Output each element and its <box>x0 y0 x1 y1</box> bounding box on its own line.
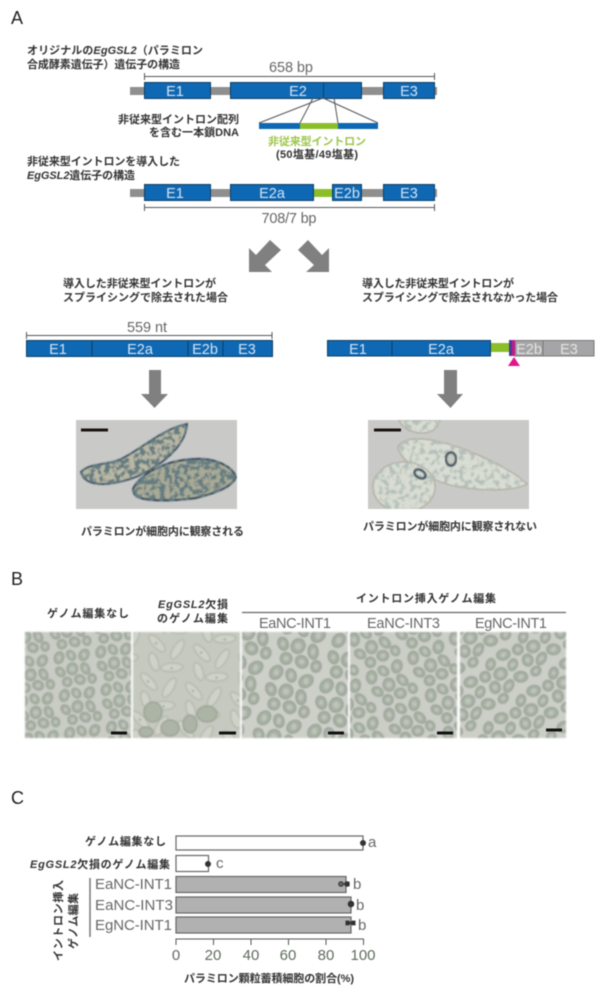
text: paramylon not observed: パラミロンが細胞内に観察されない <box>363 519 537 533</box>
text: spliced case heading: スプライシングで除去された場合 <box>63 290 228 304</box>
row label: EgNC-INT1: EgNC-INT1 <box>95 917 172 934</box>
diagram: original gene exons: E3 <box>400 84 418 100</box>
column label: EgGSL2 deletion: EgGSL2欠損 <box>158 597 228 611</box>
label: 658 bp bracket <box>144 60 434 80</box>
diagram: unspliced mRNA with stop codon: E3 <box>560 342 578 358</box>
diagram: spliced mRNA: E2a <box>127 342 154 358</box>
diagram: unspliced mRNA with stop codon: E1 <box>349 342 367 358</box>
significance letters: c <box>216 855 224 872</box>
text: non-canonical intron label <box>268 134 366 161</box>
panel: B micrographs <box>11 569 566 738</box>
x axis: 0 <box>172 947 180 964</box>
significance letters <box>216 834 377 934</box>
diagram: original gene exons: E1 <box>166 84 184 100</box>
column label: EgGSL2 deletion <box>157 597 228 625</box>
diagram: modified gene with intron: E2b <box>334 186 360 202</box>
significance letters: b <box>353 876 361 893</box>
panel: C bar chart <box>11 788 377 985</box>
diagram: spliced mRNA: E3 <box>238 342 256 358</box>
label: EaNC-INT3: EaNC-INT3 <box>367 616 440 632</box>
x axis: 80 <box>318 947 334 964</box>
diagram: original gene exons: E2 <box>289 84 307 100</box>
label: 708/7 bp bracket <box>144 204 434 227</box>
image: no editing field <box>25 632 131 738</box>
text: modified gene structure caption: EgGSL2遺伝子の構造 <box>27 168 135 182</box>
text: spliced case heading <box>63 276 228 304</box>
significance letters: b <box>356 897 364 914</box>
label: 658 bp bracket: 658 bp <box>269 60 313 76</box>
diagram: unspliced mRNA with stop codon: E2a <box>428 342 455 358</box>
image: EaNC-INT3 field <box>350 632 457 738</box>
group label: intron-insertion genome editing: イントロン挿入ゲノム編集 <box>356 591 496 605</box>
label: EaNC-INT1: EaNC-INT1 <box>259 616 331 632</box>
diagram: spliced mRNA: E2b <box>192 342 218 358</box>
image: cells with paramylon <box>76 420 237 509</box>
x axis: 100 <box>350 947 376 964</box>
label: 708/7 bp bracket: 708/7 bp <box>262 211 316 227</box>
diagram: modified gene with intron: E3 <box>400 186 418 202</box>
significance letters: a <box>368 834 377 851</box>
heading: panel A: A <box>11 8 23 28</box>
text: unspliced case heading: 導入した非従来型イントロンが <box>362 276 514 290</box>
significance letters: b <box>358 917 366 934</box>
label: 559 nt bracket: 559 nt <box>127 320 167 336</box>
bars <box>176 836 363 933</box>
group bracket and rotated label: イントロン挿入 <box>51 880 65 961</box>
scale bar: right micrograph <box>374 428 401 432</box>
row label: deletion: EgGSL2欠損のゲノム編集 <box>30 857 170 871</box>
icon: magenta stop marker <box>508 357 520 366</box>
image: cells without paramylon <box>368 420 529 512</box>
text: insert DNA caption: 非従来型イントロン配列 <box>118 112 239 126</box>
x axis <box>172 939 376 964</box>
label: 559 nt bracket <box>26 320 272 339</box>
text: original gene structure caption: オリジナルのEgGSL2（パラミロン <box>27 44 203 57</box>
image: EgNC-INT1 field <box>460 632 566 738</box>
x axis title: パラミロン顆粒蓄積細胞の割合(%) <box>184 971 354 985</box>
text: original gene structure caption: 合成酵素遺伝子）遺伝子の構造 <box>27 57 180 71</box>
text: original gene structure caption <box>27 44 203 71</box>
text: modified gene structure caption <box>27 154 180 182</box>
text: insert DNA caption: を含む一本鎖DNA <box>149 125 239 139</box>
text: modified gene structure caption: 非従来型イントロンを導入した <box>27 154 180 168</box>
diagram: modified gene with intron: E1 <box>166 186 184 202</box>
column label: EgGSL2 deletion: のゲノム編集 <box>157 611 228 625</box>
arrow: down left column <box>141 370 168 408</box>
label: EgNC-INT1: EgNC-INT1 <box>475 616 547 632</box>
diagram: single-strand DNA insert <box>259 98 378 129</box>
scale bar: left micrograph <box>81 428 108 432</box>
column label: no genome editing: ゲノム編集なし <box>47 606 129 620</box>
diagram: spliced mRNA <box>26 340 272 358</box>
panel: A gene structure and outcomes <box>11 8 594 538</box>
text: insert DNA caption <box>118 112 239 139</box>
text: non-canonical intron label: (50塩基/49塩基) <box>276 147 358 161</box>
heading: panel C: C <box>11 788 24 808</box>
arrow: down-right <box>298 240 329 272</box>
text: paramylon observed: パラミロンが細胞内に観察される <box>81 524 244 538</box>
row label: EaNC-INT3: EaNC-INT3 <box>95 897 173 914</box>
diagram: original gene exons <box>130 82 437 100</box>
diagram: spliced mRNA: E1 <box>49 342 67 358</box>
arrow: down right column <box>437 370 463 408</box>
diagram: modified gene with intron: E2a <box>259 186 286 202</box>
group bracket and rotated label: ゲノム編集 <box>66 893 80 949</box>
group bracket and rotated label <box>51 878 90 961</box>
diagram: modified gene with intron <box>130 184 437 202</box>
data points and error bars <box>206 840 366 926</box>
text: unspliced case heading <box>362 276 558 304</box>
row label: no editing: ゲノム編集なし <box>85 834 166 848</box>
text: spliced case heading: 導入した非従来型イントロンが <box>63 276 216 290</box>
x axis: 20 <box>205 947 221 964</box>
diagram: unspliced mRNA with stop codon <box>328 340 594 358</box>
image: deletion field <box>133 632 240 738</box>
heading: panel B: B <box>11 569 23 589</box>
diagram: unspliced mRNA with stop codon: E2b <box>516 342 542 358</box>
arrow: down-left <box>249 240 281 272</box>
text: unspliced case heading: スプライシングで除去されなかった場合 <box>362 290 558 304</box>
row label: EaNC-INT1: EaNC-INT1 <box>95 876 172 893</box>
x axis: 60 <box>280 947 296 964</box>
text: non-canonical intron label: 非従来型イントロン <box>268 134 366 148</box>
x axis: 40 <box>243 947 259 964</box>
image: EaNC-INT1 field <box>242 632 348 738</box>
